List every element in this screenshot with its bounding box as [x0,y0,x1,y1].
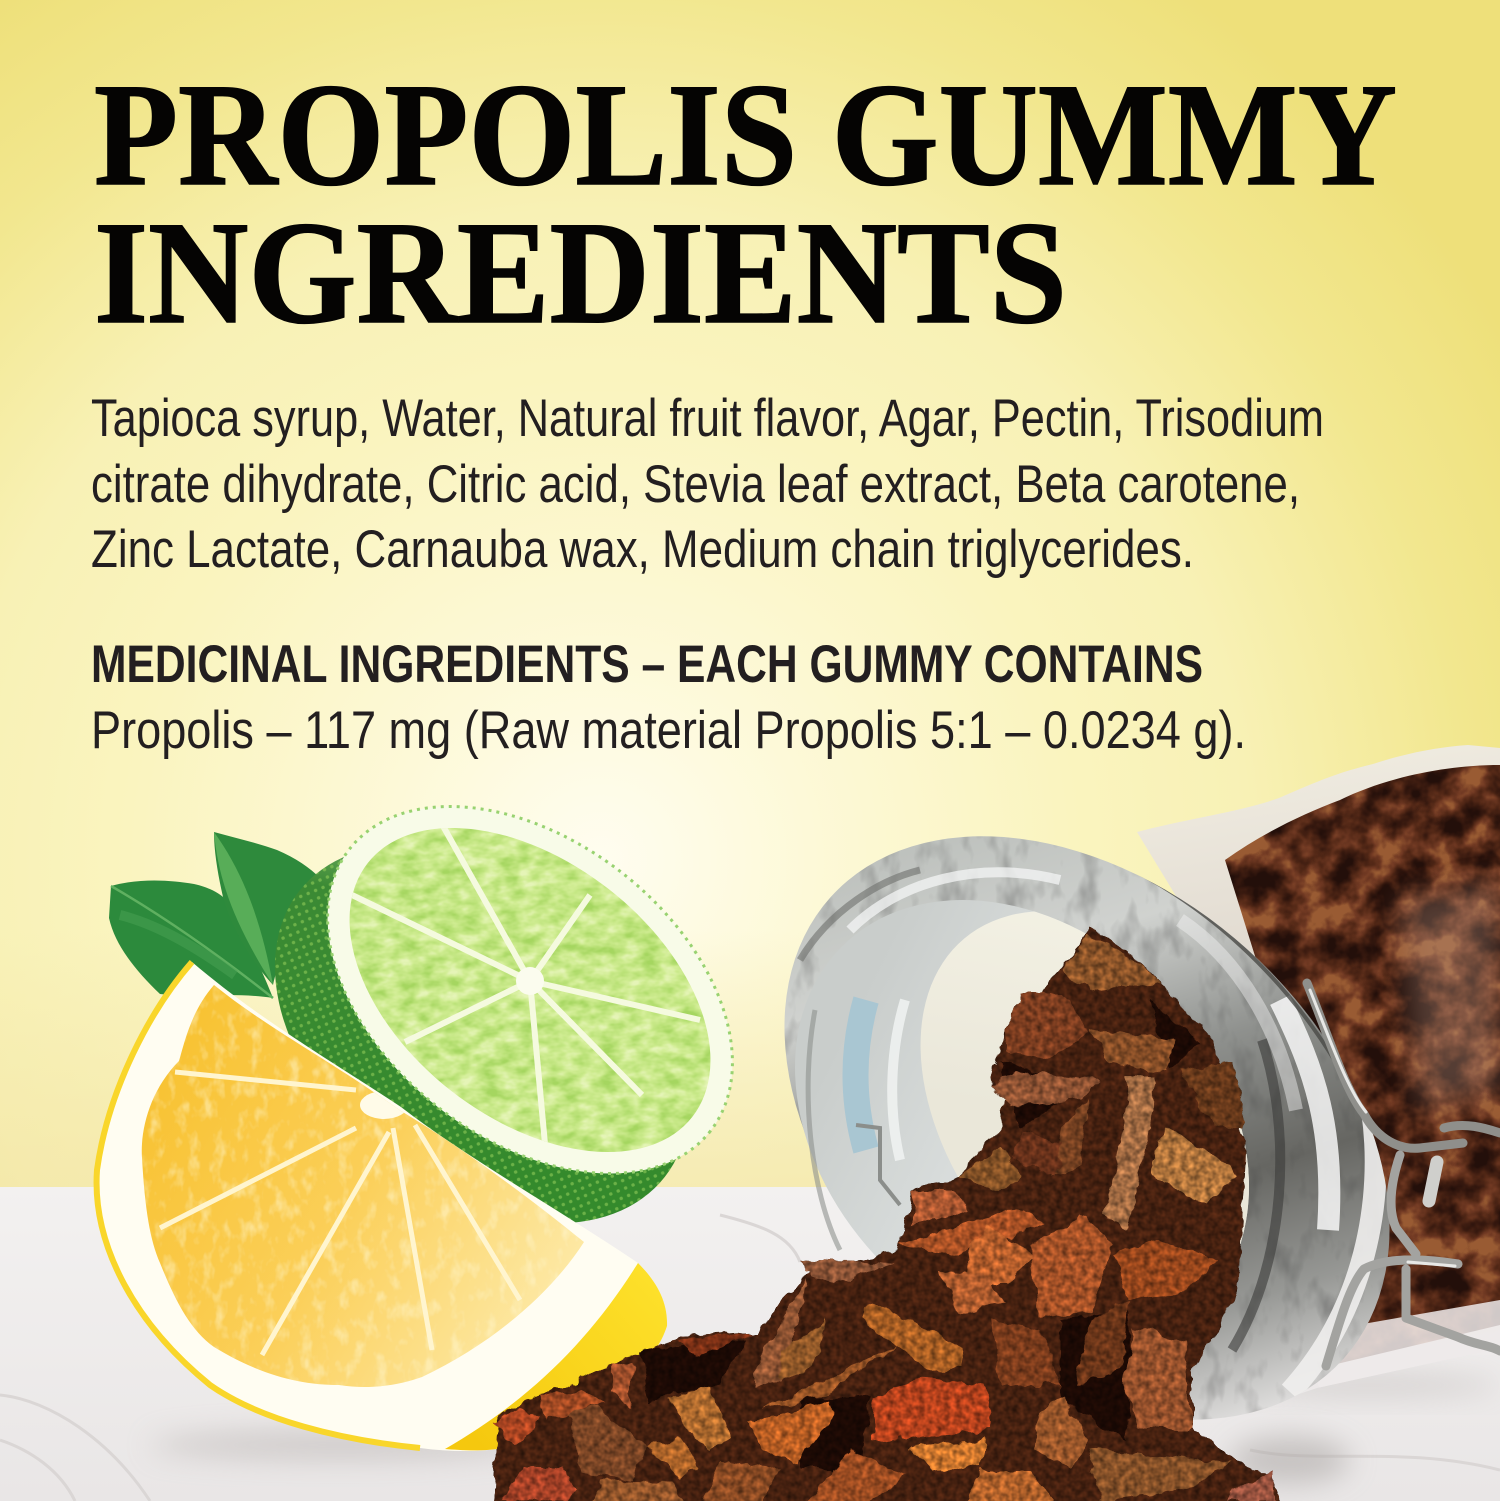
lemon flesh [142,985,584,1387]
propolis chunks [800,1260,893,1283]
medicinal ingredients text: Propolis – 117 mg (Raw material Propolis 5:1 – 0.0234 g). [91,701,1246,760]
icon: lime half [275,805,734,1222]
jar rim [784,836,1390,1420]
icon: leaves [109,832,320,998]
jar body [1130,745,1500,1435]
marble table surface [0,1187,1500,1501]
dark gaps [640,1000,1200,1470]
jar opening [795,867,1249,1256]
lime skin [202,767,762,1301]
medicinal ingredients heading: MEDICINAL INGREDIENTS – EACH GUMMY CONTAINS [91,635,1203,694]
icon: propolis pile [490,926,1290,1501]
title [94,53,1397,354]
title: INGREDIENTS [94,191,1067,354]
lime flesh [350,828,710,1152]
pile base [490,926,1290,1501]
ingredients text block: Zinc Lactate, Carnauba wax, Medium chain triglycerides. [91,520,1194,579]
jar clasp [1307,983,1500,1366]
ingredients text block [91,389,1324,579]
icon: lemon wedge [97,962,667,1451]
title: PROPOLIS GUMMY [94,53,1397,216]
icon: glass jar [784,745,1500,1420]
